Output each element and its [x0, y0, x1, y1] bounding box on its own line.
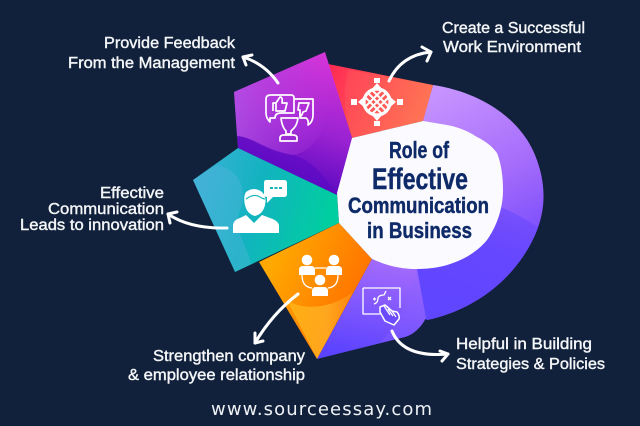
footer: website url: www.sourceessay.com	[211, 399, 432, 420]
heading: role of effective communication in business: in Business	[367, 218, 472, 243]
label: helpful strategies	[456, 336, 605, 373]
panel: orange relationship segment	[259, 223, 372, 359]
label: helpful strategies: Strategies & Policies	[456, 356, 605, 373]
label: provide feedback: From the Management	[68, 55, 236, 72]
label: effective communication: Leads to innovation	[20, 217, 164, 234]
label: helpful strategies: Helpful in Building	[456, 336, 592, 353]
icon: man with speech bubble	[233, 180, 287, 233]
icon: touch strategy screen	[363, 288, 400, 325]
label: create a successful work environment	[442, 20, 585, 56]
heading: role of effective communication in business: Communication	[348, 193, 489, 218]
heading: role of effective communication in business	[348, 137, 489, 243]
label: create a successful work environment: Create a Successful	[442, 20, 585, 37]
icon: feedback thumbs	[266, 95, 313, 141]
panel: blue strategies segment	[317, 259, 426, 359]
label: effective communication: Communication	[48, 201, 164, 218]
panel: outer purple ring	[410, 85, 544, 320]
heading: role of effective communication in business: Role of	[389, 137, 449, 163]
label: effective communication	[20, 185, 164, 234]
panel: central white blob	[337, 121, 503, 269]
label: effective communication: Effective	[100, 185, 164, 202]
label: provide feedback: Provide Feedback	[104, 35, 236, 52]
arrow: to feedback label	[243, 55, 278, 83]
arrow: to work environment label	[389, 47, 431, 81]
label: strengthen relationship: & employee relationship	[128, 367, 305, 384]
label: provide feedback	[68, 35, 236, 72]
arrow: to relationship label	[255, 294, 298, 343]
heading: role of effective communication in business: Effective	[372, 163, 468, 196]
panel: teal communication segment	[193, 148, 339, 272]
icon: cross-arm team table	[351, 78, 403, 126]
panel: red work environment segment	[328, 64, 433, 138]
icon: three connected people	[299, 255, 342, 296]
label: create a successful work environment: Work Environment	[443, 39, 582, 56]
label: strengthen relationship	[128, 348, 305, 384]
arrow: to communication label	[168, 212, 227, 228]
arrow: to strategies label	[392, 331, 448, 361]
panel: purple feedback segment	[234, 52, 352, 195]
label: strengthen relationship: Strengthen company	[153, 348, 305, 365]
